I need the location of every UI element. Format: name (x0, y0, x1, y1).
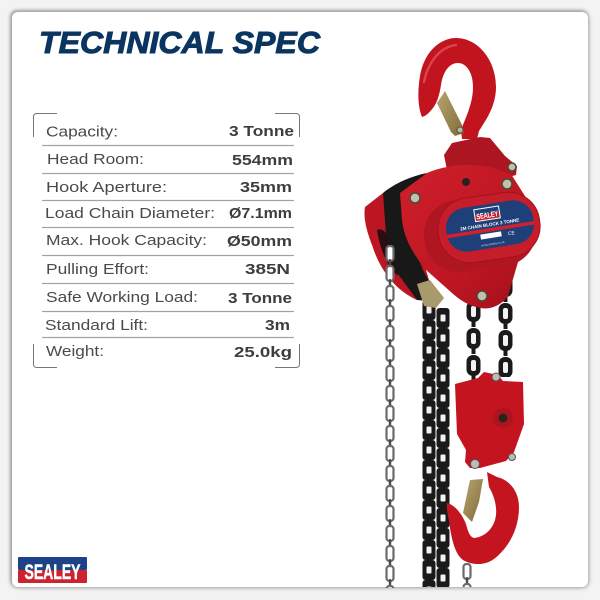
panel: specification table (34, 114, 300, 368)
lower block bolts (470, 373, 516, 468)
black mid section (383, 173, 440, 302)
grey hand chain left (385, 245, 395, 588)
lower block (455, 372, 524, 468)
lower hook (447, 472, 519, 564)
row: safe working load: 3 Tonne (228, 290, 292, 307)
row: hook aperture: Hook Aperture: (46, 179, 167, 196)
swivel neck block (444, 137, 517, 182)
row: max hook capacity (46, 232, 292, 250)
upper hook (418, 38, 496, 139)
row: pulling effort: 385N (245, 261, 290, 278)
cover shadow (420, 190, 540, 276)
row: pulling effort (46, 261, 290, 278)
row: weight: Weight: (46, 343, 104, 360)
logo: SEALEY: SEALEY (24, 561, 80, 584)
table frame brackets (34, 114, 300, 368)
latch rivet (457, 127, 463, 133)
row: standard lift: 3m (265, 317, 290, 334)
label logo: SEALEY (476, 209, 499, 221)
back plate (364, 193, 432, 300)
hook latch (437, 91, 464, 136)
lower hook latch (463, 479, 483, 522)
row: load chain diameter (45, 205, 292, 222)
row: safe working load (46, 289, 292, 307)
label white panel (480, 231, 502, 240)
row: load chain diameter: Ø7.1mm (229, 205, 292, 222)
black load chains (422, 300, 450, 587)
plate bolts (410, 163, 516, 301)
black chain to lower block (466, 300, 481, 382)
label red stripe (447, 221, 534, 238)
black chain right (498, 275, 513, 377)
row: hook aperture: 35mm (240, 179, 292, 196)
plate dark hole (462, 178, 470, 186)
row: weight: 25.0kg (234, 344, 292, 361)
row: head room: Head Room: (47, 151, 144, 168)
row: standard lift: Standard Lift: (45, 317, 148, 334)
label heading: 2M CHAIN BLOCK 3 TONNE (460, 217, 520, 232)
row: safe working load: Safe Working Load: (46, 289, 198, 306)
label url: www.sealey.co.uk (481, 240, 505, 248)
grey chain under hook (462, 563, 472, 587)
row: standard lift (45, 317, 290, 334)
back plate opening (377, 229, 398, 276)
row: capacity (46, 123, 294, 140)
row: hook aperture (46, 179, 292, 196)
row: head room (47, 151, 293, 169)
title: TECHNICAL SPEC (39, 25, 321, 60)
row: capacity: 3 Tonne (229, 123, 294, 140)
illustration: chain block hoist (364, 38, 544, 588)
label mark: CE (508, 230, 516, 237)
row: max hook capacity: Max. Hook Capacity: (46, 232, 207, 249)
row: max hook capacity: Ø50mm (227, 233, 292, 250)
cover face (434, 188, 544, 267)
row: load chain diameter: Load Chain Diameter: (45, 205, 215, 222)
row: head room: 554mm (232, 152, 293, 169)
table row dividers (42, 146, 294, 338)
row: weight (46, 343, 292, 361)
lower gold bracket (417, 280, 444, 308)
row: pulling effort: Pulling Effort: (46, 261, 149, 278)
front plate (400, 165, 537, 308)
lower block pulley hole (493, 408, 513, 428)
logo: SEALEY (18, 557, 87, 584)
product label (443, 197, 537, 255)
row: capacity: Capacity: (46, 124, 118, 140)
